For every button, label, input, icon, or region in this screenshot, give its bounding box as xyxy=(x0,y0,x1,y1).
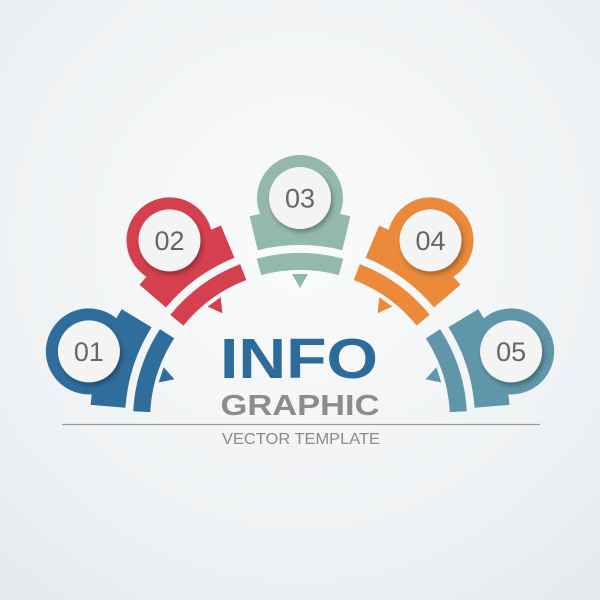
badge 02: 02 xyxy=(154,226,185,256)
badge 04: 04 xyxy=(415,226,446,256)
title: INFO: INFO xyxy=(220,327,378,391)
segment 05 xyxy=(410,290,568,427)
badge 04 xyxy=(400,209,462,271)
badge 03 xyxy=(269,167,331,229)
subtitle: GRAPHIC: GRAPHIC xyxy=(220,390,380,422)
segment 02 xyxy=(104,176,263,343)
badge 05 xyxy=(480,320,542,382)
segment 04 xyxy=(337,176,496,343)
badge 05: 05 xyxy=(496,337,526,367)
badge 02 xyxy=(138,209,200,271)
segment 03 xyxy=(250,155,350,288)
badge 03: 03 xyxy=(285,184,315,214)
badge 01: 01 xyxy=(74,337,104,367)
badge 01 xyxy=(58,320,120,382)
tagline: VECTOR TEMPLATE xyxy=(222,431,380,448)
segment 01 xyxy=(32,290,190,427)
